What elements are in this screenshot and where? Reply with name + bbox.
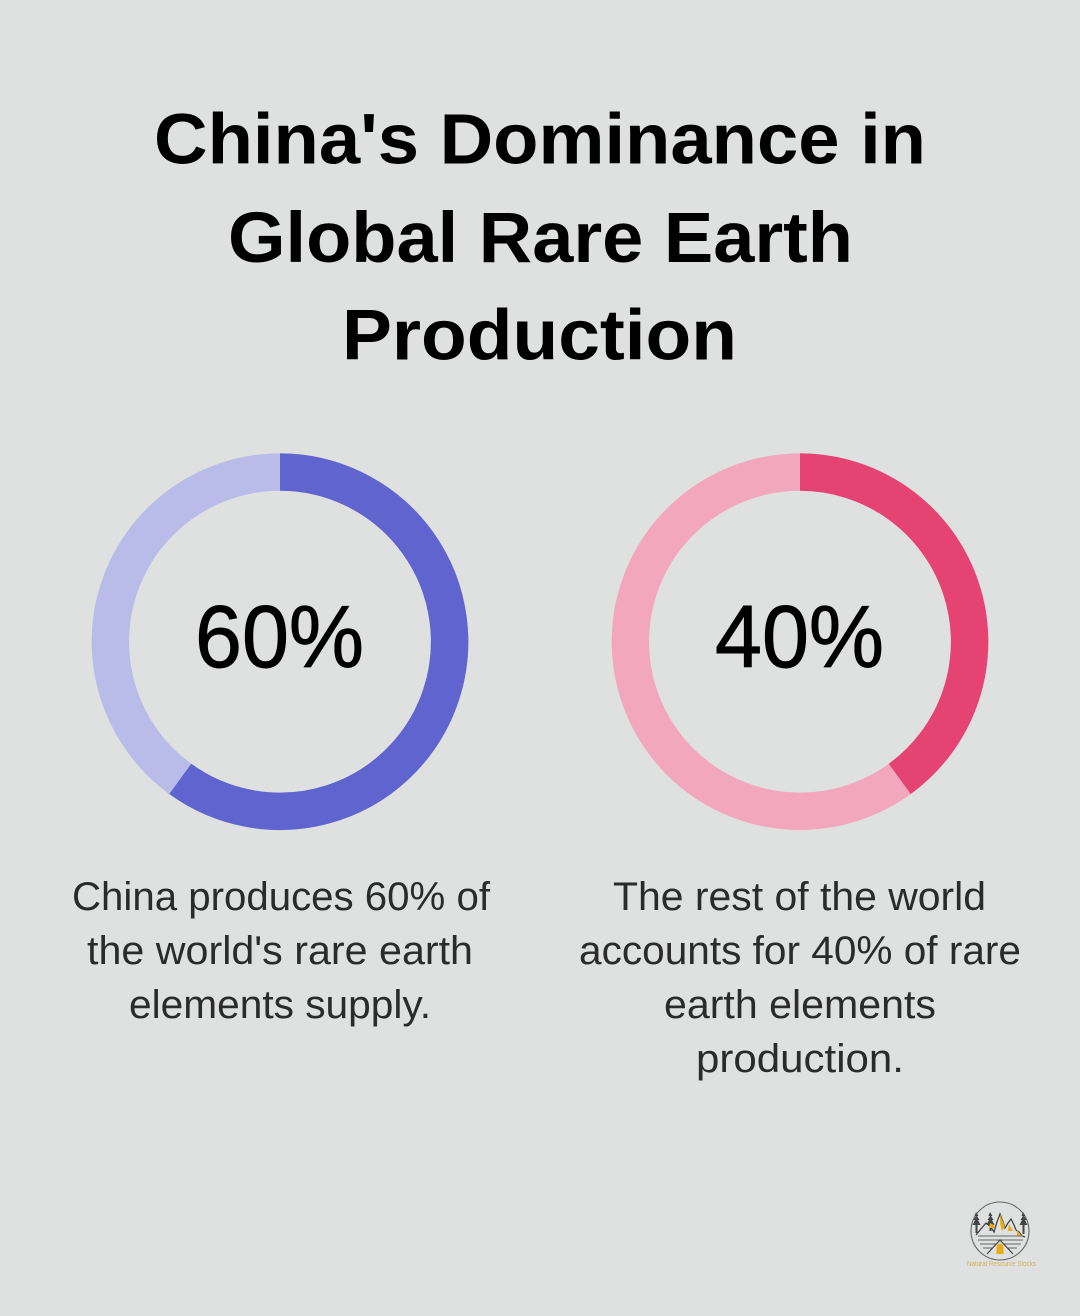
text block: China description: the world's rare earth [87,929,473,973]
value: 60%: 60% [195,587,364,686]
text block: China description: elements supply. [129,983,431,1027]
text block: rest of world description: accounts for 40% of rare [579,929,1021,973]
text block: China description: China produces 60% of [72,875,491,919]
donut chart: China 60% [110,472,450,811]
title: Production [342,296,737,376]
text block: rest of world description: earth elements [664,983,936,1027]
title [154,100,926,376]
icon: Natural Resource Stocks logo [967,1202,1036,1268]
value: 40%: 40% [715,587,884,686]
text block: rest of world description [579,875,1021,1081]
text block: China description [72,875,491,1027]
text block: rest of world description: production. [696,1037,904,1081]
title: Global Rare Earth [228,199,853,278]
title: China's Dominance in [154,100,926,180]
logo caption: Natural Resource Stocks [967,1261,1036,1268]
donut chart: rest of world 40% [630,472,970,811]
text block: rest of world description: The rest of the world [613,875,986,919]
